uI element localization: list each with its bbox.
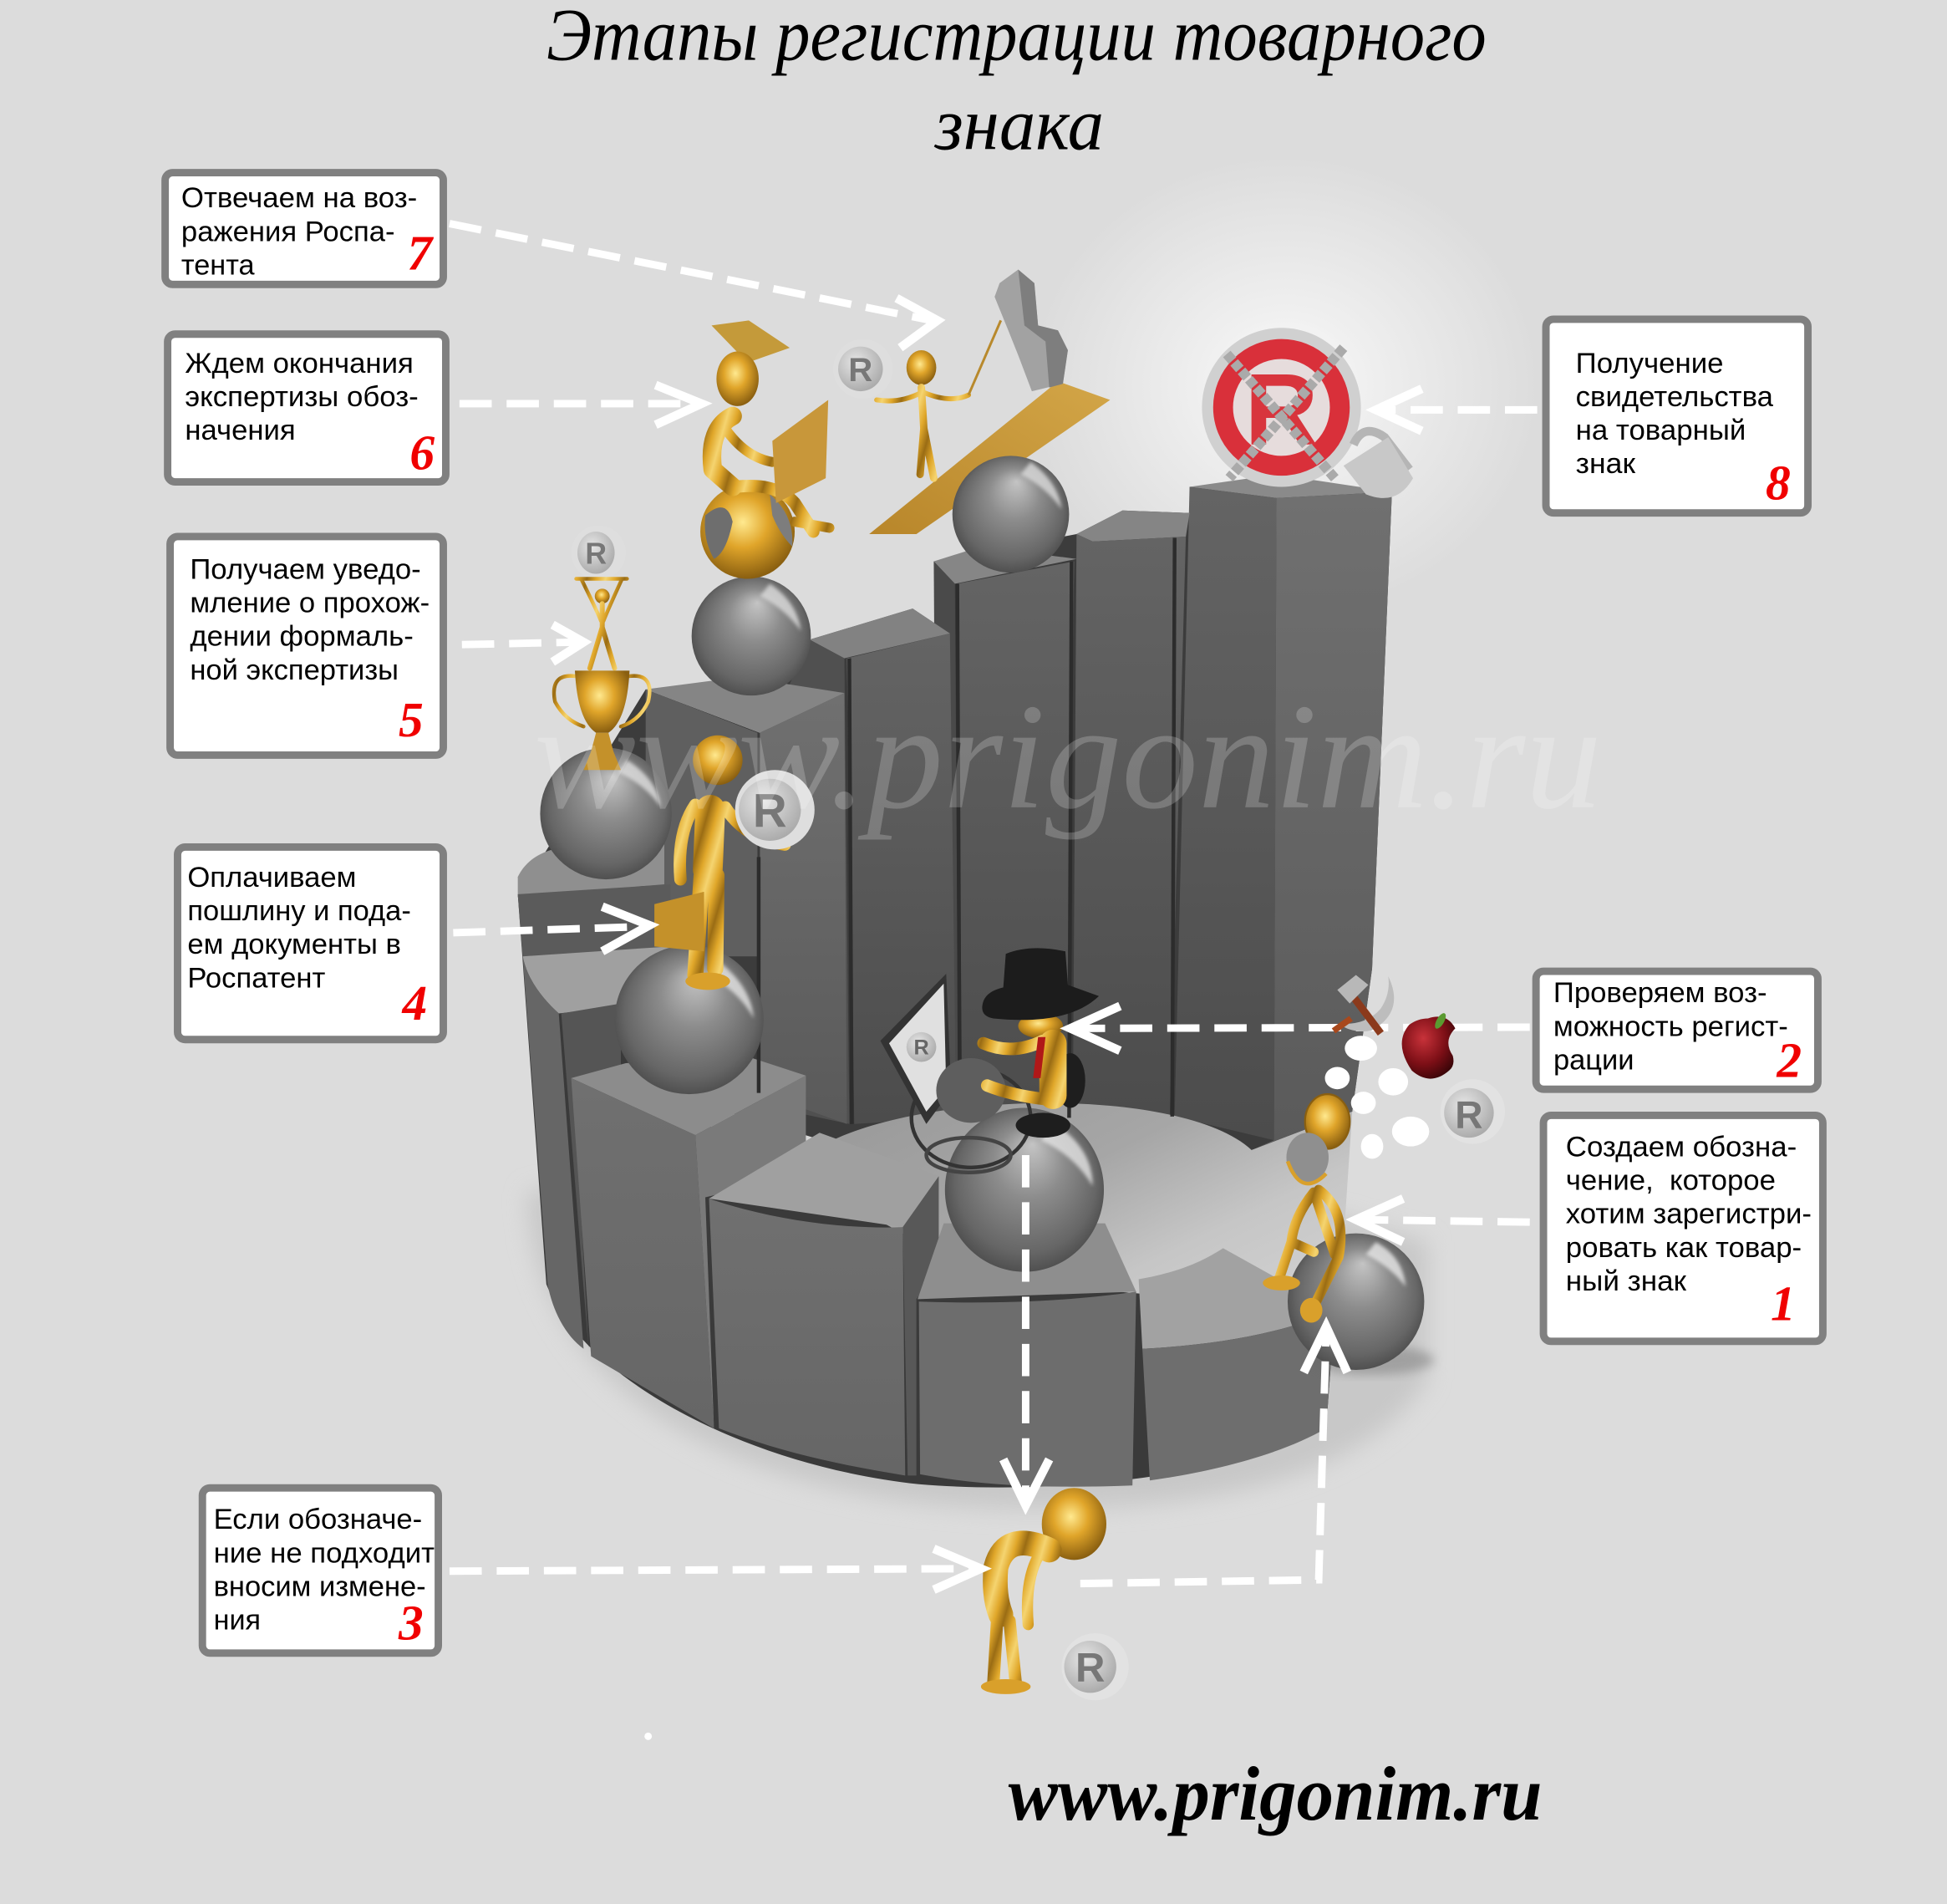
panel: step 3 xyxy=(202,1488,439,1653)
figure: man with pointer xyxy=(877,320,1001,478)
podium shadow xyxy=(528,1117,1428,1509)
dashed arrow: box 4 xyxy=(453,907,649,951)
panel: step 6 xyxy=(168,334,445,482)
podium: circular staircase of columns xyxy=(518,475,1428,1509)
text: step 1: хотим зарегистри- xyxy=(1566,1199,1812,1230)
text: step 2 xyxy=(1553,977,1788,1076)
dashed arrow: box 2 xyxy=(1070,1006,1530,1051)
text: step 1: Создаем обозна- xyxy=(1566,1131,1797,1163)
text: step 6: Ждем окончания xyxy=(185,348,414,379)
text: step 4: Роспатент xyxy=(187,962,326,994)
back column 3 xyxy=(933,547,1076,1117)
text: step 8: свидетельства xyxy=(1576,381,1773,413)
panel: step 8 xyxy=(1546,319,1808,513)
front wall backing xyxy=(518,894,1334,1488)
icon: locked red R mark xyxy=(1202,328,1413,498)
number 4: 4 xyxy=(401,975,427,1031)
icon: golden globe xyxy=(700,485,795,578)
footer website: www.prigonim.ru xyxy=(1009,1751,1543,1836)
text: step 6 xyxy=(185,348,419,446)
text: step 4 xyxy=(187,862,411,994)
icon: R coin near pointer man: R xyxy=(848,351,872,389)
text: step 3: ние не подходит xyxy=(214,1537,435,1569)
sphere 4 xyxy=(540,748,672,879)
text: step 3: ния xyxy=(214,1605,261,1637)
number 3: 3 xyxy=(398,1595,424,1650)
text: step 1: ный знак xyxy=(1566,1265,1687,1297)
sphere 3 xyxy=(615,945,764,1094)
small white dot xyxy=(644,1733,652,1740)
step 1 xyxy=(1139,1248,1334,1480)
text: step 3: Если обозначе- xyxy=(214,1504,422,1535)
text: step 5: ной экспертизы xyxy=(190,654,399,686)
text: step 5: мление о прохож- xyxy=(190,588,430,619)
text: step 7 xyxy=(181,182,417,281)
icon: bitten apple xyxy=(1402,1011,1456,1079)
panel: step 1 xyxy=(1543,1115,1822,1341)
dashed arrow: box 7 xyxy=(450,223,938,348)
back column 4 xyxy=(762,608,956,1124)
panel: step 4 xyxy=(177,847,443,1040)
text: step 5 xyxy=(190,553,430,686)
icon: R coin near businessman xyxy=(735,770,815,849)
text: step 6: экспертизы обоз- xyxy=(185,381,419,413)
text: step 8 xyxy=(1576,348,1773,480)
number 8: 8 xyxy=(1766,455,1791,510)
sphere 2 xyxy=(945,1107,1104,1272)
step 4 xyxy=(572,1056,806,1428)
text: step 8: на товарный xyxy=(1576,415,1746,446)
dashed arrow: back to step 1 xyxy=(1080,1326,1347,1584)
text: step 6: начения xyxy=(185,415,296,446)
text: step 7: ражения Роспа- xyxy=(181,216,395,247)
number 1: 1 xyxy=(1771,1276,1796,1331)
title: знака xyxy=(933,84,1104,165)
text: step 5: Получаем уведо- xyxy=(190,553,421,585)
figure: graduate with laptop xyxy=(711,320,830,532)
text: step 4: пошлину и пода- xyxy=(187,895,411,927)
icon: R coin near pointer man xyxy=(833,339,892,399)
icon: hammer and sickle xyxy=(1334,975,1394,1033)
text: step 4: Оплачиваем xyxy=(187,862,356,893)
grey robot figure xyxy=(994,269,1068,391)
golden plank xyxy=(869,381,1110,534)
number 7: 7 xyxy=(407,225,434,280)
step 5 xyxy=(523,946,670,1349)
text: step 2: можность регист- xyxy=(1553,1011,1788,1042)
figure: sad man xyxy=(981,1488,1106,1694)
dashed arrow: down to step 3 xyxy=(1004,1155,1050,1505)
panel: step 7 xyxy=(165,173,443,284)
text: step 2: рации xyxy=(1553,1044,1634,1076)
dashed arrow: box 8 xyxy=(1375,389,1538,431)
step 3 xyxy=(709,1133,938,1475)
text: step 3 xyxy=(214,1504,435,1637)
step 2 xyxy=(918,1224,1136,1487)
sphere 5 xyxy=(692,576,811,695)
number 6: 6 xyxy=(409,425,435,481)
panel: step 5 xyxy=(170,537,443,755)
trophy with figure xyxy=(554,526,649,770)
text: step 2: Проверяем воз- xyxy=(1553,977,1767,1009)
column dividers xyxy=(759,537,1175,1124)
glow behind registered mark xyxy=(1030,155,1540,615)
dashed arrow: box 5 xyxy=(462,624,583,662)
back wall backing xyxy=(518,487,1392,1150)
icon: locked red R mark: R xyxy=(1245,353,1319,466)
text: step 1 xyxy=(1566,1131,1812,1297)
title xyxy=(546,0,1487,165)
figure: thinker with open head xyxy=(1263,1094,1350,1323)
text: step 1: чение, которое xyxy=(1566,1165,1776,1197)
icon: R coin near businessman: R xyxy=(753,785,787,837)
back column 5 xyxy=(646,677,846,1124)
text: step 5: дении формаль- xyxy=(190,621,414,653)
sphere 6 xyxy=(953,456,1069,573)
figure: businessman with briefcase xyxy=(654,736,785,990)
watermark: www.prigonim.ru xyxy=(534,673,1602,841)
icon: R coin near sad man xyxy=(1062,1633,1129,1700)
trophy with figure: R xyxy=(585,537,607,571)
text: step 3: вносим измене- xyxy=(214,1571,426,1602)
number 5: 5 xyxy=(399,692,424,747)
thought dots xyxy=(1325,1036,1429,1158)
text: step 1: ровать как товар- xyxy=(1566,1232,1802,1264)
figure: man in hat at laptop xyxy=(881,948,1099,1173)
inner floor xyxy=(807,1103,1352,1316)
icon: R coin near sad man: R xyxy=(1075,1646,1105,1691)
text: step 7: Отвечаем на воз- xyxy=(181,182,417,214)
step 6 xyxy=(518,844,670,959)
dashed arrow: box 6 xyxy=(460,385,702,425)
dashed arrow: box 1 xyxy=(1356,1199,1530,1242)
icon: R coin in thought xyxy=(1441,1079,1505,1144)
back column 1 xyxy=(1175,475,1392,1150)
text: step 4: ем документы в xyxy=(187,929,401,960)
panel: step 2 xyxy=(1536,971,1817,1089)
text: step 8: знак xyxy=(1576,448,1636,480)
number 2: 2 xyxy=(1776,1032,1802,1087)
dashed arrow: box 3 xyxy=(450,1549,981,1590)
text: step 8: Получение xyxy=(1576,348,1724,379)
figure: man in hat at laptop: R xyxy=(913,1036,929,1060)
sphere 1 xyxy=(1288,1234,1434,1375)
back column 2 xyxy=(1073,511,1190,1117)
icon: R coin in thought: R xyxy=(1455,1092,1483,1136)
text: step 7: тента xyxy=(181,249,255,281)
